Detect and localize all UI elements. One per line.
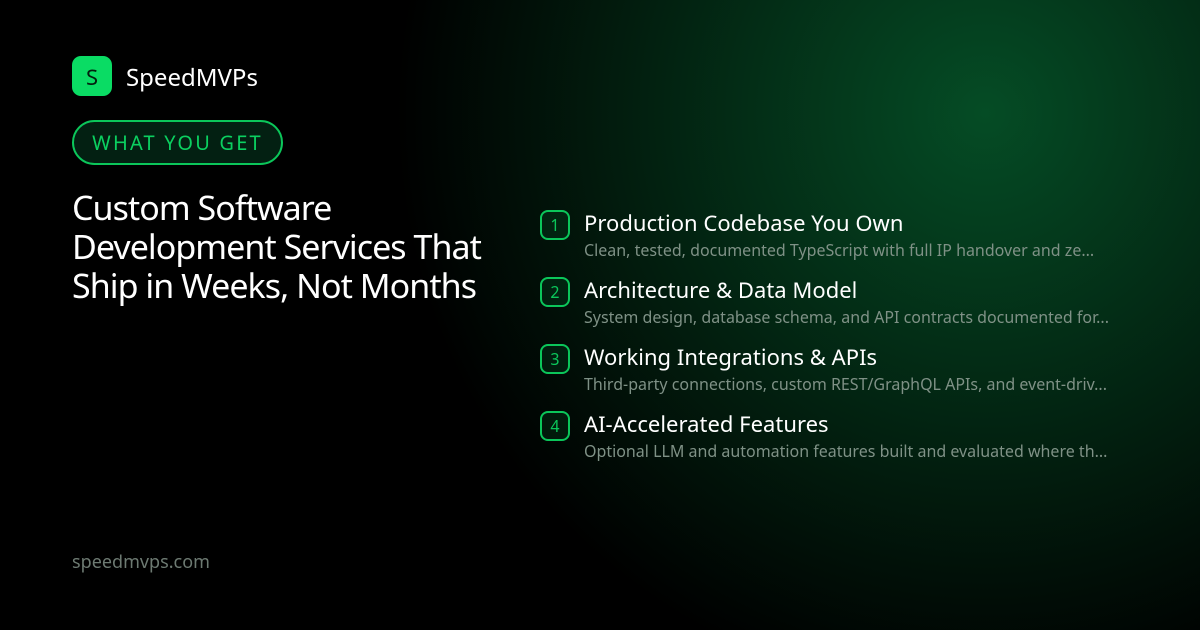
item 3 number bbox=[540, 344, 570, 374]
item 4 description: Optional LLM and automation features built and evaluated where th... bbox=[584, 440, 1107, 462]
item 1 description: Clean, tested, documented TypeScript with full IP handover and ze... bbox=[584, 239, 1094, 261]
item 3 heading: Working Integrations & APIs bbox=[584, 342, 877, 372]
item 1 number: 1 bbox=[550, 214, 560, 236]
item 2 description: System design, database schema, and API contracts documented for... bbox=[584, 306, 1109, 328]
item 1 number bbox=[540, 210, 570, 240]
item 1 heading: Production Codebase You Own bbox=[584, 208, 903, 238]
item 4 heading: AI-Accelerated Features bbox=[584, 409, 829, 439]
title: Development Services That bbox=[72, 223, 481, 269]
item 2 number: 2 bbox=[550, 281, 560, 303]
title: Custom Software bbox=[72, 184, 331, 230]
title bbox=[72, 184, 482, 308]
logo icon: S bbox=[86, 62, 98, 92]
item 3 number: 3 bbox=[550, 348, 560, 370]
item 2 number bbox=[540, 277, 570, 307]
title: Ship in Weeks, Not Months bbox=[72, 262, 476, 308]
brand name: SpeedMVPs bbox=[126, 61, 258, 94]
item 2 heading: Architecture & Data Model bbox=[584, 275, 857, 305]
badge: WHAT YOU GET bbox=[92, 129, 263, 156]
footer url: speedmvps.com bbox=[72, 550, 210, 574]
item 4 number bbox=[540, 411, 570, 441]
item 4 number: 4 bbox=[550, 415, 560, 437]
logo icon bbox=[72, 56, 112, 96]
item 3 description: Third-party connections, custom REST/GraphQL APIs, and event-driv... bbox=[584, 373, 1107, 395]
logo bbox=[72, 56, 258, 96]
badge bbox=[72, 120, 283, 165]
